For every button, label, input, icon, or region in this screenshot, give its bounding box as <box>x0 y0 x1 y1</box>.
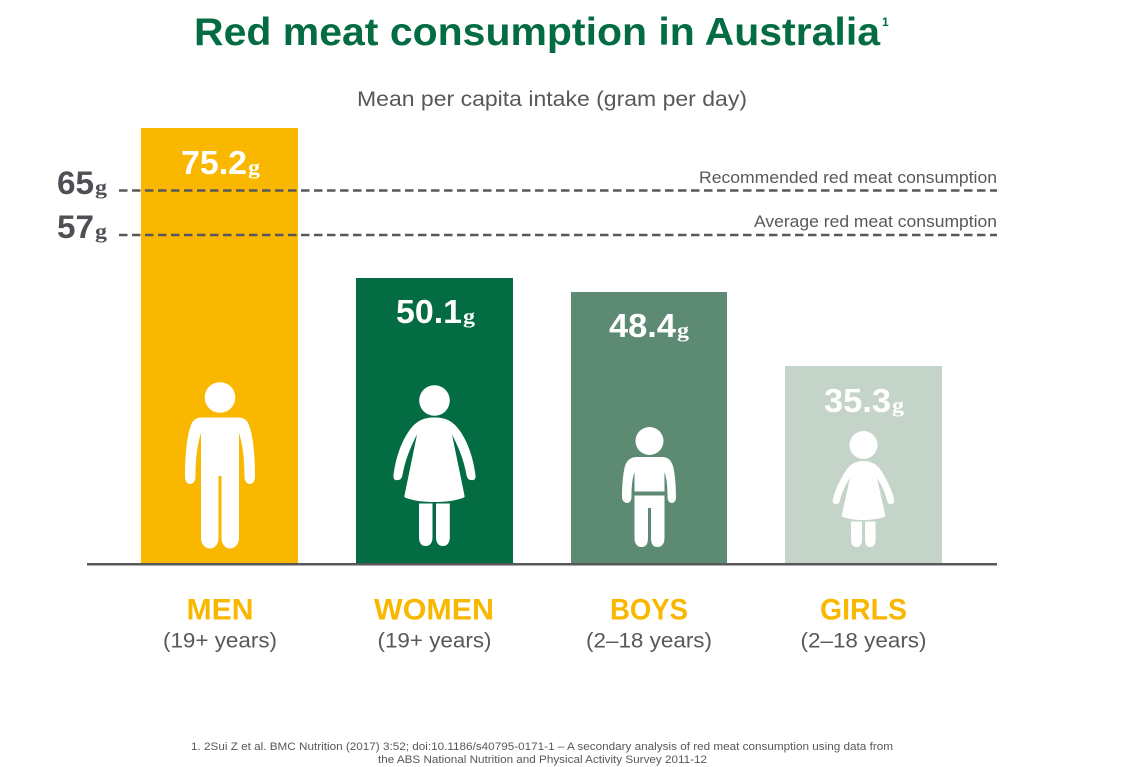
bar: women <box>356 278 513 564</box>
bar: boys <box>571 292 727 564</box>
value: women: 50.1 <box>396 293 462 330</box>
axis baseline <box>87 563 997 566</box>
category label: men: (19+ years) <box>163 630 277 652</box>
footnote: 1. 2Sui Z et al. BMC Nutrition (2017) 3:52; doi:10.1186/s40795-0171-1 – A secondary analysis of red meat consumption using data from <box>191 741 893 753</box>
category label: boys: BOYS <box>610 594 688 626</box>
category label: women <box>374 594 494 652</box>
title: 1 <box>882 15 889 29</box>
value: men: 75.2 <box>181 144 247 181</box>
label: average: Average red meat consumption <box>754 213 997 231</box>
reference line: average 57g <box>57 209 997 245</box>
category label: boys <box>586 594 712 652</box>
value: girls: 35.3 <box>824 382 891 419</box>
value: boys: g <box>677 320 689 342</box>
category label: women: (19+ years) <box>378 630 492 652</box>
label: recommended: Recommended red meat consumption <box>699 169 997 187</box>
category label: boys: (2–18 years) <box>586 630 712 652</box>
value: women: g <box>463 306 475 328</box>
label: 57g: 57 <box>57 209 94 245</box>
label: 65g: 65 <box>57 165 94 201</box>
bar: girls <box>785 366 942 564</box>
title: Red meat consumption in Australia <box>194 11 881 54</box>
reference line: recommended 65g <box>57 165 997 201</box>
value: boys: 48.4 <box>609 307 677 344</box>
icon: girl <box>833 431 894 547</box>
category label: men <box>163 594 277 652</box>
icon: woman <box>393 385 476 546</box>
value: girls: g <box>892 395 904 417</box>
label: 65g: g <box>95 177 107 199</box>
value: men: g <box>248 157 260 179</box>
icon: boy <box>622 427 676 547</box>
label: 57g: g <box>95 221 107 243</box>
category label: girls <box>800 594 926 652</box>
category label: men: MEN <box>186 594 254 626</box>
bar: men <box>141 128 298 564</box>
footnote <box>191 741 893 766</box>
icon: man <box>185 382 255 548</box>
footnote: the ABS National Nutrition and Physical Activity Survey 2011-12 <box>378 754 707 766</box>
category label: girls: GIRLS <box>820 594 907 626</box>
category label: girls: (2–18 years) <box>800 630 926 652</box>
subtitle: Mean per capita intake (gram per day) <box>357 88 747 111</box>
category label: women: WOMEN <box>374 594 494 626</box>
